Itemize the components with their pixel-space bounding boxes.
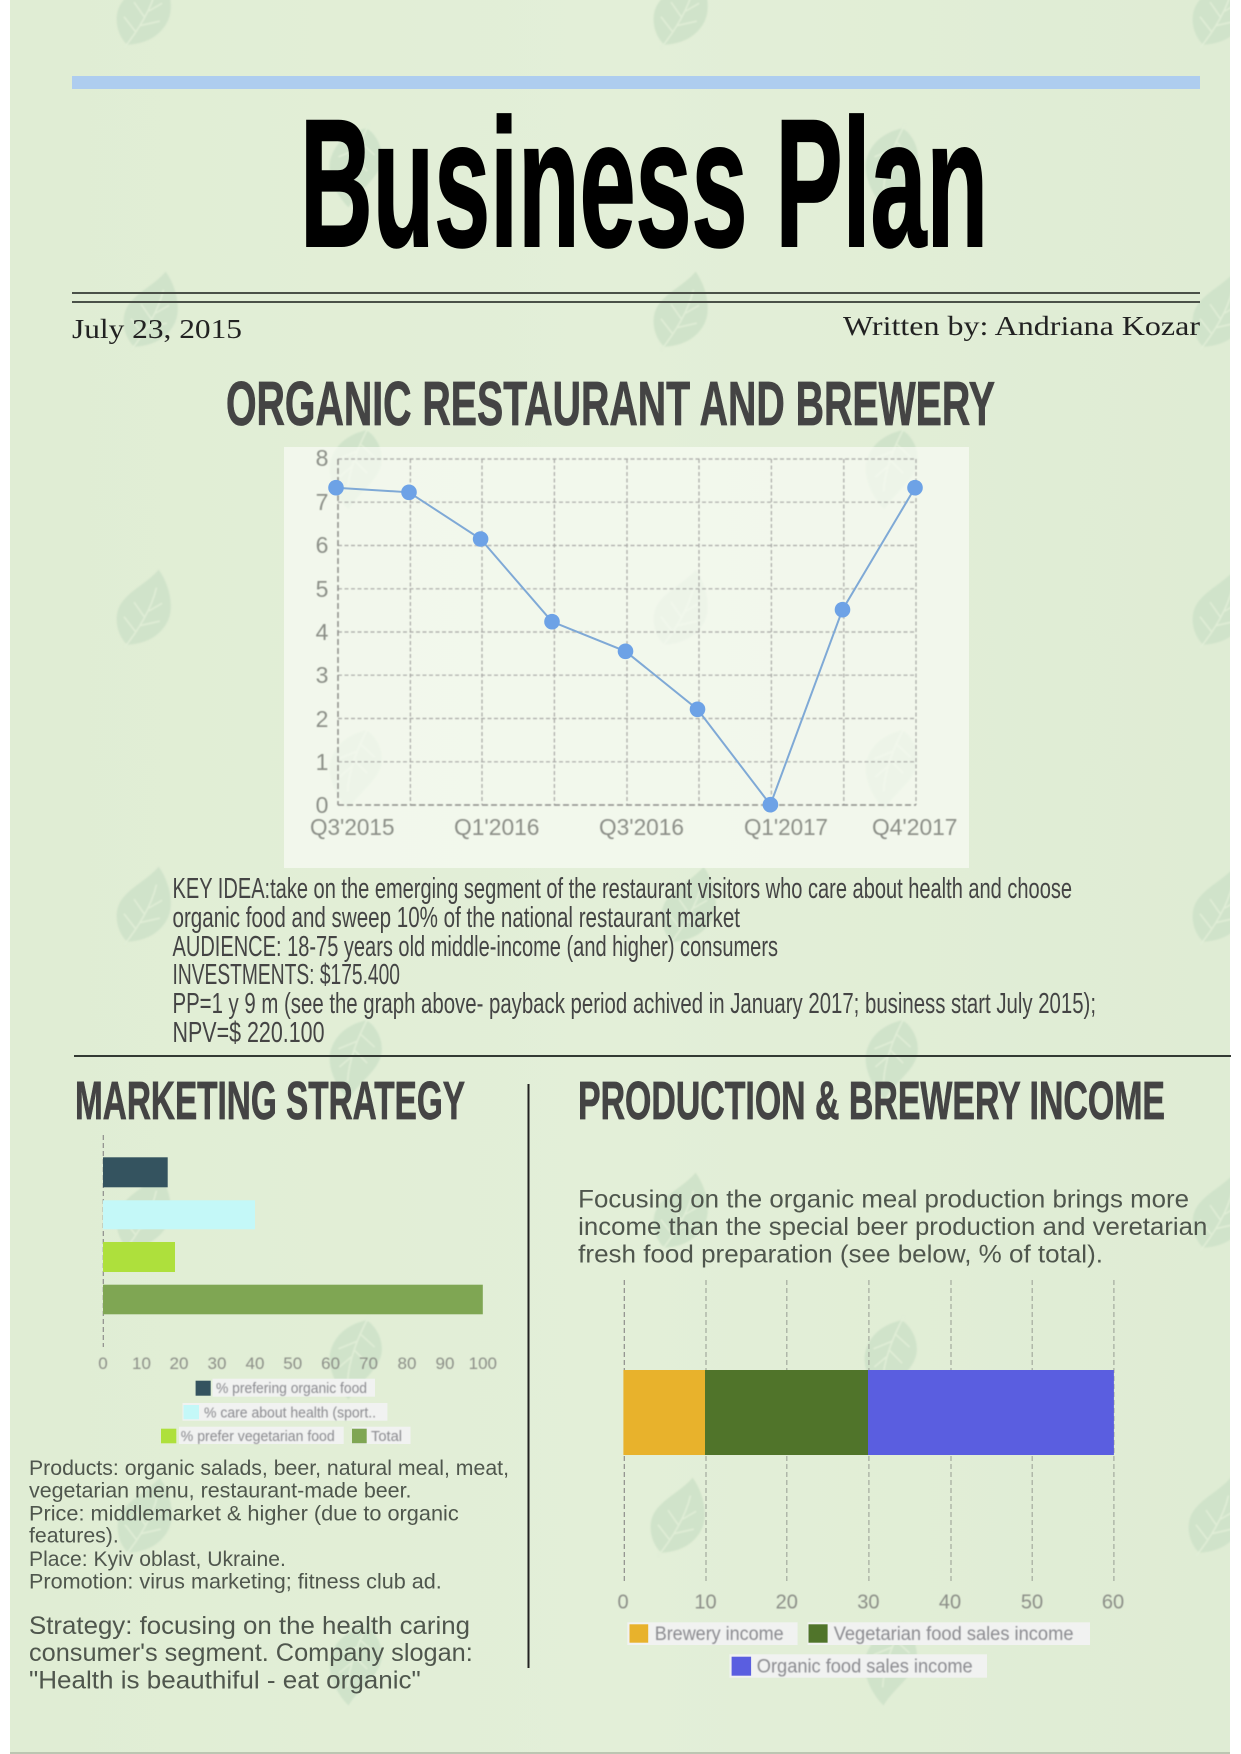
heading: marketing strategy: MARKETING STRATEGY <box>75 1071 465 1131</box>
text block: marketing mix: features). <box>29 1525 119 1548</box>
text block: key idea: INVESTMENTS: $175.400 <box>172 959 400 991</box>
bar chart x axis labels: 30 <box>208 1354 226 1373</box>
bar chart x axis labels: 100 <box>469 1354 497 1373</box>
text block: production focus: income than the special beer production and veretarian <box>578 1213 1207 1241</box>
y axis labels: 4 <box>316 619 329 645</box>
y axis labels: 0 <box>316 792 328 818</box>
y axis labels: 6 <box>316 532 328 558</box>
legend: total: Total <box>371 1428 402 1445</box>
bar: prefer vegetarian food <box>103 1242 175 1272</box>
text block: key idea: NPV=$ 220.100 <box>172 1017 324 1049</box>
double rule under title <box>72 292 1200 303</box>
bottom edge strip <box>10 1752 1230 1754</box>
legend: total <box>352 1427 410 1445</box>
text block: strategy and slogan <box>29 1612 473 1694</box>
segment: brewery income <box>623 1370 705 1455</box>
chart background <box>284 447 969 868</box>
data line <box>336 488 915 805</box>
y axis labels: 7 <box>316 489 328 515</box>
x axis labels: Q4'2017 <box>872 814 958 840</box>
text block: marketing mix: vegetarian menu, restaurant-made beer. <box>29 1479 412 1502</box>
text block: strategy and slogan: "Health is beauthiful - eat organic" <box>29 1666 421 1694</box>
text block: strategy and slogan: Strategy: focusing on the health caring <box>29 1612 470 1640</box>
bar: total <box>103 1285 483 1314</box>
y axis labels: 3 <box>316 662 328 688</box>
x axis labels: Q3'2015 <box>310 814 394 840</box>
y axis labels: 2 <box>316 706 328 732</box>
bar chart x axis labels: 10 <box>132 1354 151 1373</box>
x axis labels: Q3'2016 <box>599 814 684 840</box>
legend: organic food sales income: Organic food sales income <box>757 1657 973 1678</box>
bar chart axis <box>102 1135 104 1347</box>
text block: marketing mix: Products: organic salads, beer, natural meal, meat, <box>29 1457 509 1480</box>
bar: care about health <box>103 1200 255 1229</box>
bar chart x axis labels: 60 <box>321 1354 340 1373</box>
blue header bar <box>72 76 1200 89</box>
legend: preferring organic food: % prefering organic food <box>216 1380 367 1397</box>
income chart x axis labels: 10 <box>694 1591 717 1613</box>
income chart x axis labels: 30 <box>857 1591 880 1613</box>
y axis labels: 5 <box>316 576 328 602</box>
bar: preferring organic food <box>103 1157 168 1187</box>
y axis labels <box>316 445 329 818</box>
x axis labels <box>310 814 958 840</box>
bar chart x axis labels: 40 <box>246 1354 264 1373</box>
bar chart x axis labels: 20 <box>170 1354 188 1373</box>
y axis labels: 8 <box>316 445 328 471</box>
bar chart x axis labels: 70 <box>359 1354 378 1373</box>
legend: prefer vegetarian food: % prefer vegetarian food <box>181 1428 335 1445</box>
x axis labels: Q1'2017 <box>744 814 828 840</box>
bar chart x axis labels: 50 <box>283 1354 302 1373</box>
text block: key idea: AUDIENCE: 18-75 years old middle-income (and higher) consumers <box>172 931 778 963</box>
bar chart x axis labels: 90 <box>436 1354 454 1373</box>
income chart x axis labels: 50 <box>1021 1591 1043 1613</box>
legend: brewery income: Brewery income <box>655 1624 784 1645</box>
text block: strategy and slogan: consumer's segment. Company slogan: <box>29 1639 473 1667</box>
panel: marketing bar chart <box>98 1135 497 1445</box>
y axis labels: 1 <box>316 749 328 775</box>
chart grid <box>338 459 916 805</box>
text block: key idea <box>172 873 1096 1049</box>
bar chart x axis labels: 80 <box>398 1354 416 1373</box>
income chart grid <box>624 1280 1114 1583</box>
author: Written by: Andriana Kozar <box>843 311 1200 341</box>
segment: vegetarian food sales income <box>705 1370 868 1455</box>
text block: production focus <box>578 1185 1207 1269</box>
income chart x axis labels: 0 <box>617 1591 629 1613</box>
text block: production focus: Focusing on the organic meal production brings more <box>578 1185 1189 1213</box>
bar chart x axis labels <box>98 1354 497 1373</box>
income chart x axis labels: 60 <box>1102 1591 1124 1613</box>
vertical divider <box>528 1084 530 1668</box>
income chart x axis labels: 40 <box>939 1591 961 1613</box>
text block: production focus: fresh food preparation (see below, % of total). <box>578 1241 1103 1269</box>
horizontal divider <box>74 1055 1231 1057</box>
text block: marketing mix <box>29 1457 509 1593</box>
text block: marketing mix: Price: middlemarket & higher (due to organic <box>29 1503 459 1526</box>
data points <box>328 480 923 812</box>
panel: income stacked bar chart <box>617 1280 1124 1678</box>
panel: line chart <box>284 445 969 868</box>
segment: organic food sales income <box>868 1370 1114 1455</box>
x axis labels: Q1'2016 <box>454 814 540 840</box>
legend: vegetarian food sales income: Vegetarian food sales income <box>834 1624 1074 1645</box>
text block: marketing mix: Promotion: virus marketing; fitness club ad. <box>29 1570 442 1593</box>
income chart x axis labels: 20 <box>776 1591 798 1613</box>
legend: care about health: % care about health (sport.. <box>204 1404 376 1421</box>
text block: marketing mix: Place: Kyiv oblast, Ukraine. <box>29 1548 286 1571</box>
text block: key idea: organic food and sweep 10% of the national restaurant market <box>172 902 740 934</box>
date: July 23, 2015 <box>72 314 242 344</box>
income chart x axis labels <box>617 1591 1124 1613</box>
bar chart x axis labels: 0 <box>98 1354 108 1373</box>
